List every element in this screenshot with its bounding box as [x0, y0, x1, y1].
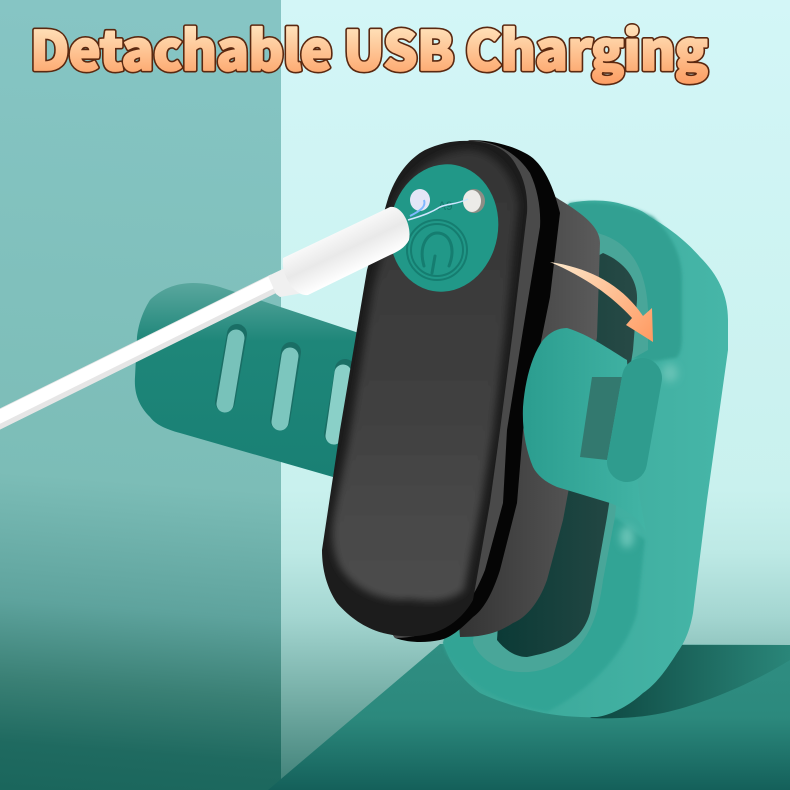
strap — [135, 283, 365, 477]
silicone clip — [443, 201, 728, 717]
title: Detachable USB Charging — [30, 7, 708, 86]
charging contacts with spark — [408, 189, 485, 220]
tab stem — [580, 377, 622, 460]
clip highlight bumps — [620, 364, 678, 548]
teal charging disc — [380, 156, 508, 300]
right background panel — [281, 0, 790, 790]
cord — [0, 283, 275, 422]
floor — [268, 644, 790, 790]
clip recess ring — [473, 233, 648, 672]
title: Detachable USB Charging — [30, 7, 708, 86]
device back housing — [440, 190, 600, 637]
clip upper inner band — [540, 202, 682, 362]
device front body — [322, 141, 527, 636]
clip opening — [497, 253, 637, 657]
connector — [283, 207, 410, 295]
USB cable — [0, 207, 410, 422]
orange arrow — [550, 262, 653, 342]
left background panel — [0, 0, 281, 790]
strap slots — [225, 334, 345, 436]
tab knob — [627, 378, 642, 462]
device black band — [340, 140, 560, 642]
model marking: A9 — [438, 199, 453, 213]
device grey strip — [340, 140, 540, 638]
icon: power button — [407, 220, 467, 280]
device front face shading — [332, 150, 518, 601]
strain relief — [268, 266, 303, 297]
clip lower inner band — [443, 517, 645, 712]
clip tab — [523, 328, 646, 532]
cast shadow — [590, 645, 790, 718]
